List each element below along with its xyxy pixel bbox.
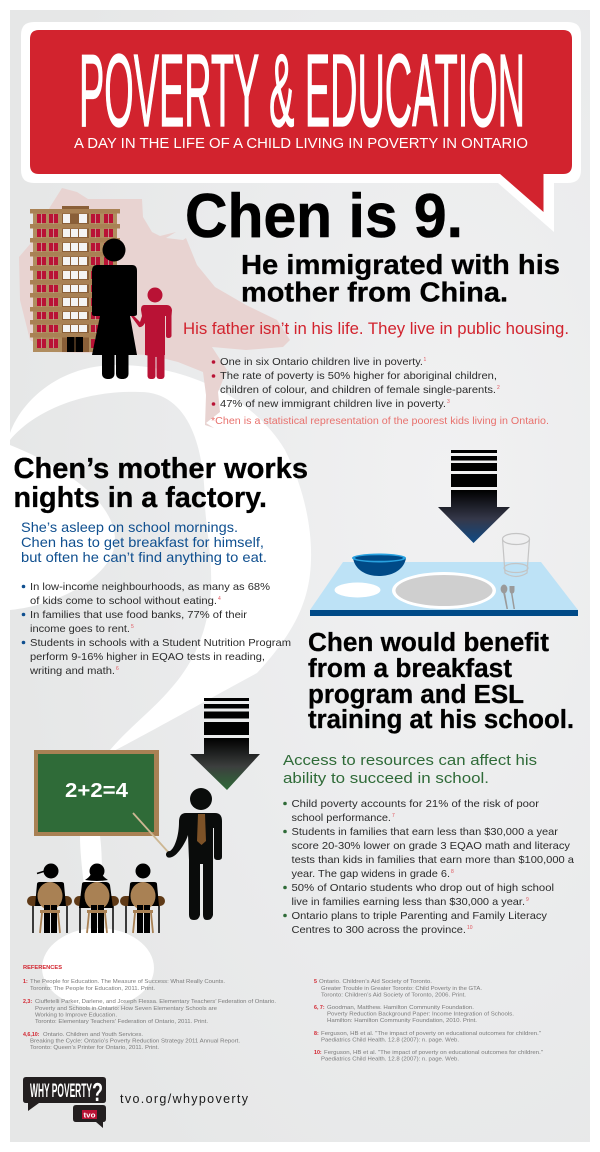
references: right column: Paediatrics Child Health. 12.8 (2007): n. page. Web. [321, 1038, 459, 1044]
references: right column: Ferguson, HB et al. "The impact of poverty on educational outcomes for children." [321, 1031, 541, 1037]
heading: would benefit: program and ESL [308, 681, 524, 709]
text block: school facts: school performance. [292, 813, 391, 824]
subheading: access to resources: Access to resources can affect his [283, 752, 537, 769]
references: left column: 1: [23, 979, 28, 985]
arrow: down to teacher [190, 698, 260, 790]
references: left column: The People for Education. The Measure of Success: What Really Counts. [30, 979, 225, 985]
text block: Ontario poverty facts [212, 357, 500, 410]
references: left column: Toronto: Queen’s Printer for Ontario, 2011. Print. [30, 1045, 159, 1051]
subheading: father: His father isn’t in his life. They live in public housing. [183, 319, 569, 338]
subheading: breakfast: Chen has to get breakfast for himself, [21, 534, 264, 550]
text block: food facts: 4 [218, 596, 221, 602]
subheading: breakfast: but often he can’t find anything to eat. [21, 549, 267, 565]
text block: food facts: In low-income neighbourhoods, as many as 68% [30, 582, 270, 593]
banner: title speech bubble [21, 22, 581, 232]
subtitle: A DAY IN THE LIFE OF A CHILD LIVING IN POVERTY IN ONTARIO [74, 136, 528, 152]
icon: bowl [352, 554, 406, 576]
student two [74, 864, 119, 933]
text block: school facts: year. The gap widens in grade 6. [292, 869, 450, 880]
heading: mother works nights: nights in a factory. [14, 482, 267, 514]
text block: school facts: 7 [392, 813, 395, 819]
heading: would benefit: training at his school. [308, 706, 574, 734]
text block: school facts: tests than kids in families that earn more than $100,000 a [292, 855, 574, 866]
text block: school facts [283, 799, 574, 936]
references: left column: Breaking the Cycle: Ontario’s Poverty Reduction Strategy 2011 Annual Report. [30, 1038, 240, 1044]
icon: breakfast table [310, 534, 578, 616]
references: left column: REFERENCES [23, 965, 62, 971]
text block: food facts: of kids come to school without eating. [30, 596, 217, 607]
references: right column: Toronto: Children’s Aid Society of Toronto, 2006. Print. [321, 992, 466, 998]
references: right column: Goodman, Matthew. Hamilton Community Foundation. [327, 1005, 474, 1011]
text block: Ontario poverty facts: 1 [424, 357, 426, 363]
references: right column: Poverty Reduction Background Paper: Income Integration of Schools. [327, 1012, 514, 1018]
text block: school facts: Centres to 300 across the province. [292, 925, 466, 936]
text block: school facts: 50% of Ontario students who drop out of high school [292, 883, 554, 894]
references: left column: Ciuffetelli Parker, Darlene, and Joseph Flessa. Elementary Teachers’ Federation of Ontario. [35, 999, 276, 1005]
logo: Why Poverty? and tvo: tvo [84, 1112, 96, 1120]
link: tvo.org/whypoverty: tvo.org/whypoverty [120, 1092, 249, 1106]
text block: Ontario poverty facts: children of colour, and children of female single-parents. [220, 385, 496, 396]
references: right column: 6, 7: [314, 1005, 325, 1011]
icon: child figure [131, 288, 172, 379]
text block: Ontario poverty facts: 47% of new immigrant children live in poverty. [220, 399, 446, 410]
text block: Ontario poverty facts: The rate of poverty is 50% higher for aboriginal children, [220, 371, 497, 382]
icon: mother figure [92, 238, 137, 379]
references: right column [314, 979, 543, 1062]
text block: school facts: score 20-30% lower on grade 3 EQAO math and literacy [292, 841, 571, 852]
text block: food facts: 6 [116, 666, 119, 672]
text block: school facts: Ontario plans to triple Parenting and Family Literacy [292, 911, 548, 922]
text block: food facts: Students in schools with a Student Nutrition Program [30, 638, 291, 649]
references: left column: Poverty and Schools in Ontario: How Seven Elementary Schools are [35, 1006, 217, 1012]
references: right column: 5 [314, 979, 317, 985]
text block: Ontario poverty facts: 3 [447, 399, 450, 405]
icon: chalkboard [34, 750, 159, 836]
heading: would benefit: Chen would benefit [308, 629, 550, 657]
references: right column: Paediatrics Child Health. 12.8 (2007): n. page. Web. [321, 1056, 459, 1062]
text block: food facts: income goes to rent. [30, 624, 130, 635]
references: right column: Ontario. Children’s Aid Society of Toronto. [319, 979, 432, 985]
heading: Chen is 9: Chen is 9. [185, 182, 463, 251]
references: left column: 2,3: [23, 999, 32, 1005]
references: left column: Working to Improve Education. [35, 1012, 117, 1018]
references: right column: Greater Trouble in Greater Toronto: Child Poverty in the GTA. [321, 986, 482, 992]
text block: school facts: Students in families that earn less than $30,000 a year [292, 827, 559, 838]
text block: food facts: In families that use food banks, 77% of their [30, 610, 248, 621]
heading: mother works nights: Chen’s mother works [14, 453, 308, 485]
heading: would benefit: from a breakfast [308, 655, 513, 683]
heading: mother works nights [14, 453, 308, 514]
references: left column: Ontario. Children and Youth Services. [43, 1032, 143, 1038]
text block: food facts: 5 [131, 624, 134, 630]
text block: school facts: 9 [526, 897, 529, 903]
text block: food facts: perform 9-16% higher in EQAO tests in reading, [30, 652, 265, 663]
text block: food facts: writing and math. [29, 666, 115, 677]
student one [27, 864, 72, 933]
logo: Why Poverty? and tvo [23, 1077, 106, 1128]
references: left column [23, 965, 276, 1051]
subheading: access to resources [283, 752, 537, 787]
icon: three students at desks [27, 864, 165, 933]
student three [120, 864, 165, 933]
icon: teacher with pointer [133, 788, 222, 920]
icon: plate [392, 572, 496, 609]
chalk sum: 2+2=4 [65, 780, 129, 802]
references: right column: Ferguson, HB et al. "The impact of poverty on educational outcomes for children." [324, 1050, 543, 1056]
subheading: breakfast [21, 519, 267, 565]
icon: glass [502, 534, 530, 576]
references: right column: 8: [314, 1031, 319, 1037]
icon: spoon and fork [501, 584, 515, 609]
text block: school facts: 10 [467, 925, 473, 931]
heading: immigrated [241, 249, 560, 308]
subheading: breakfast: She’s asleep on school mornings. [21, 519, 238, 535]
note: statistical representation: *Chen is a statistical representation of the poorest kids living in Ontario. [211, 415, 549, 427]
text block: Ontario poverty facts: 2 [497, 385, 500, 391]
heading: immigrated: He immigrated with his [241, 249, 560, 280]
background: white question mark [10, 365, 311, 1008]
icon: apartment building [30, 206, 120, 352]
text block: Ontario poverty facts: One in six Ontario children live in poverty. [220, 357, 423, 368]
references: right column: 10: [314, 1050, 322, 1056]
references: left column: Toronto: The People for Education, 2011. Print. [30, 986, 155, 992]
heading: would benefit [308, 629, 574, 734]
references: right column: Hamilton: Hamilton Community Foundation, 2010. Print. [327, 1018, 477, 1024]
logo: Why Poverty? and tvo: WHY POVERTY [30, 1081, 92, 1102]
text block: school facts: Child poverty accounts for 21% of the risk of poor [292, 799, 540, 810]
subheading: access to resources: ability to succeed in school. [283, 770, 489, 787]
references: left column: Toronto: Elementary Teachers’ Federation of Ontario, 2011. Print. [35, 1019, 208, 1025]
background: Ontario map [19, 188, 290, 428]
text block: school facts: 8 [451, 869, 454, 875]
text block: food facts [22, 582, 291, 677]
arrow: down to breakfast table [438, 450, 510, 543]
logo: Why Poverty? and tvo: ? [92, 1077, 103, 1107]
heading: immigrated: mother from China. [241, 276, 508, 308]
text block: school facts: live in families earning less than $30,000 a year. [292, 897, 525, 908]
references: left column: 4,6,10: [23, 1032, 40, 1038]
